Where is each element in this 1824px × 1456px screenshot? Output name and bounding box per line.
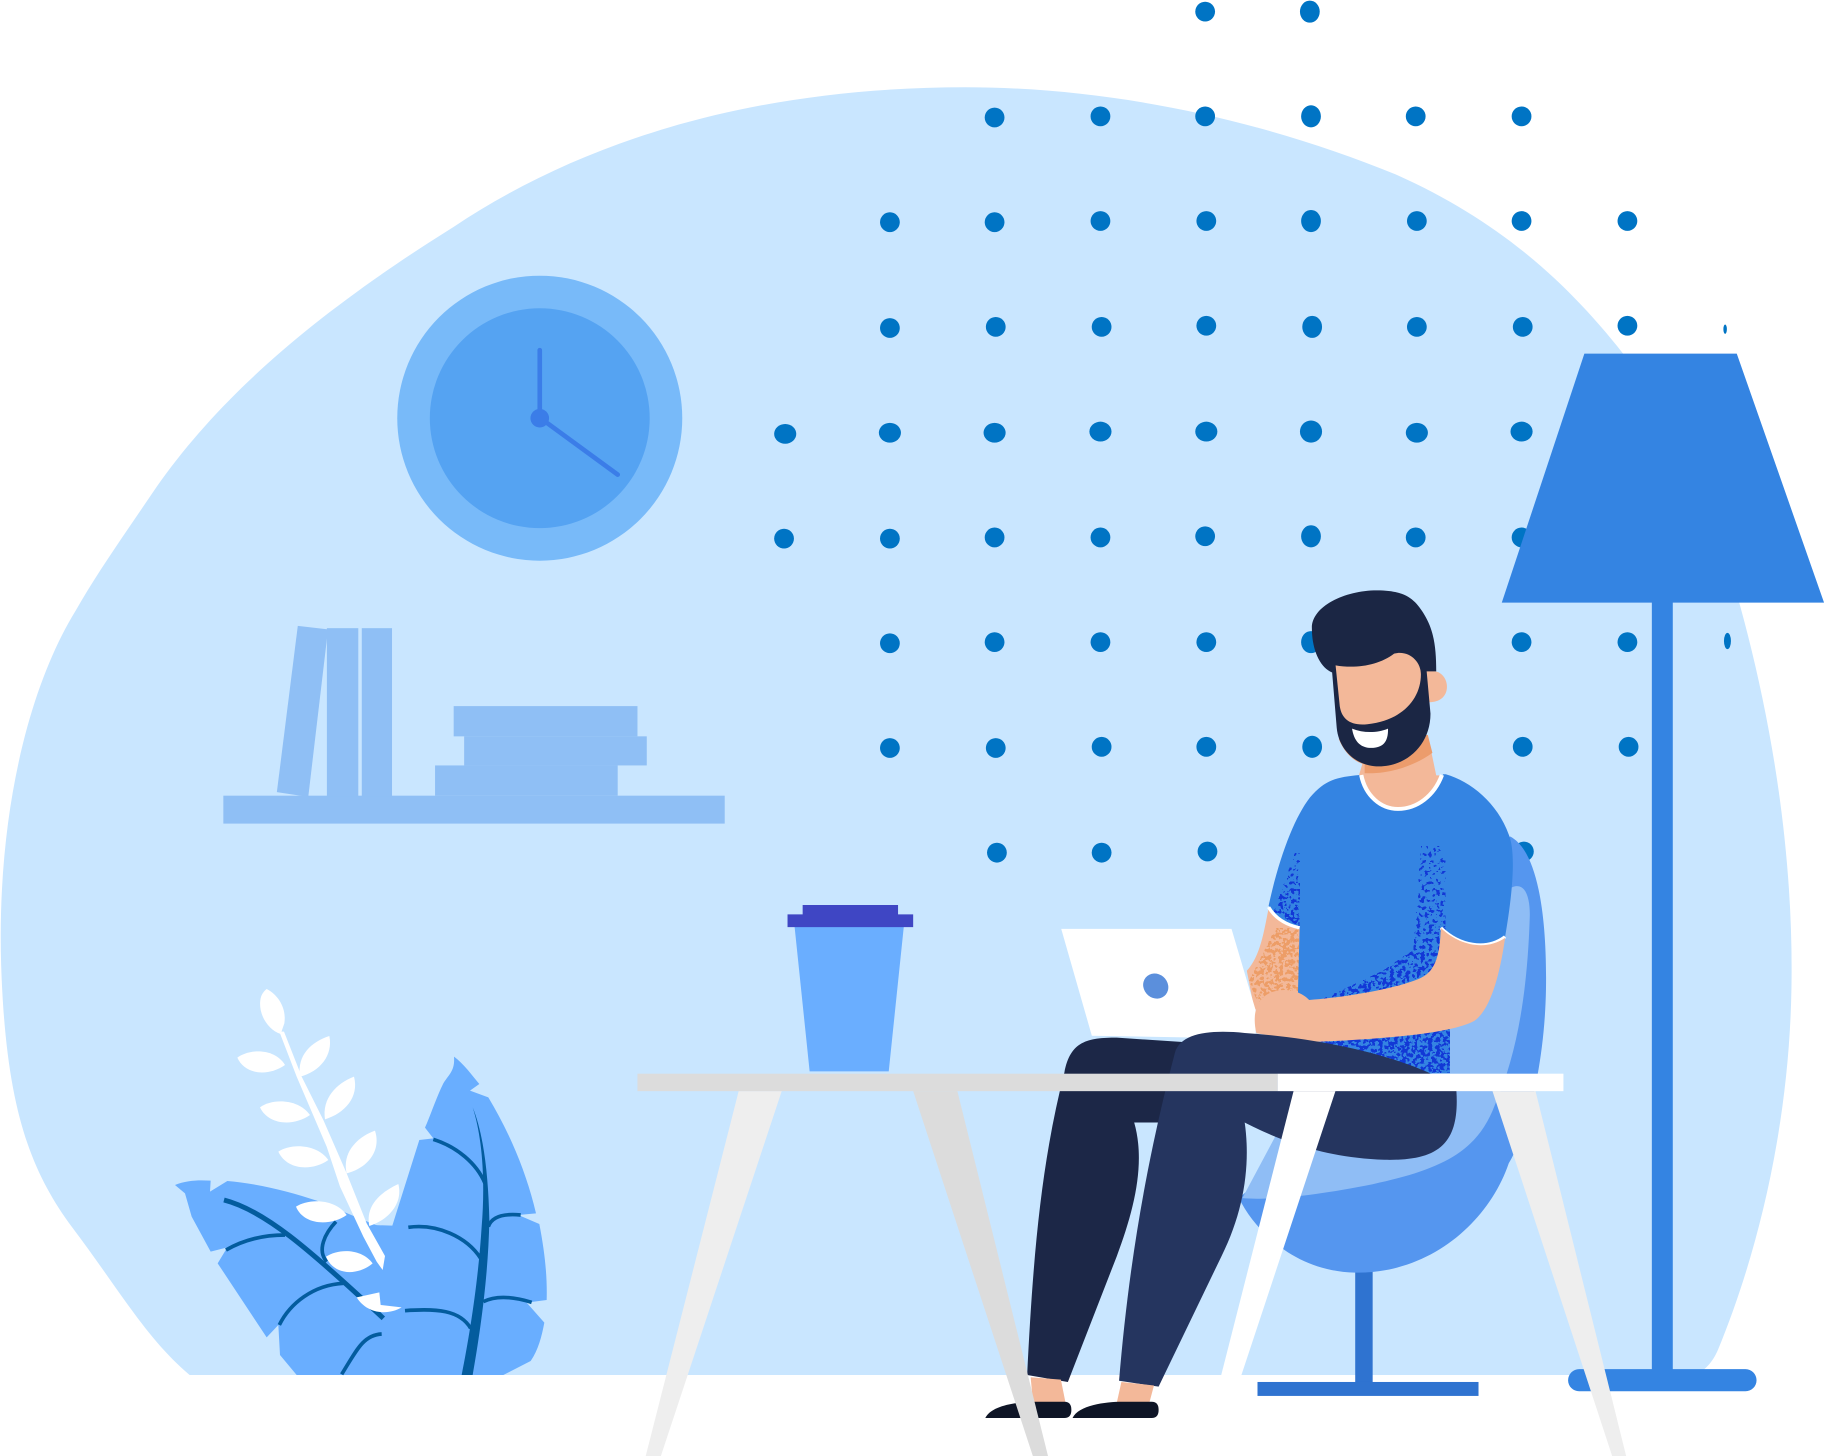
leaves [175,1057,547,1375]
front leg [1119,1032,1457,1387]
shirt [1269,774,1513,1073]
side veins [224,1139,532,1374]
front arm [1255,928,1505,1042]
front foot [1073,1382,1159,1418]
coffee cup [788,905,913,1071]
back leg [1027,1038,1187,1382]
floor lamp [1502,354,1824,1391]
man seated with laptop [1061,590,1513,1073]
laptop logo [1138,969,1173,1003]
hair and beard [1312,590,1436,766]
shirt speckle [1318,846,1446,1001]
forearm behind laptop [1247,908,1300,1010]
waist speckle [1310,1028,1450,1073]
neck [1359,735,1444,817]
plant [175,989,547,1375]
table [637,1074,1626,1456]
bookshelf with books [223,626,725,824]
back foot [985,1377,1071,1418]
smile [1352,729,1388,748]
lower scene [637,1032,1626,1456]
sleeve speckle [1274,853,1300,927]
collar and sleeve trims [1269,775,1505,945]
main vein [462,1107,489,1375]
arm speckle [1249,928,1299,1008]
wall clock [397,276,682,561]
chair [1239,836,1546,1396]
dot grid [774,1,1731,863]
white sprig [237,989,402,1312]
ear [1426,671,1447,702]
laptop [1061,929,1256,1039]
neck shadow [1339,735,1432,773]
face [1336,653,1421,725]
